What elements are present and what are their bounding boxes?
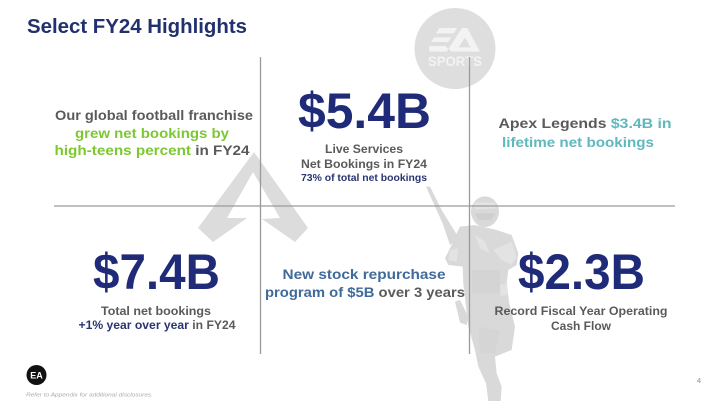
stat: total net bookings: Total net bookings [101, 306, 211, 318]
stat: live services net bookings: $5.4B [298, 83, 431, 139]
text block: global football franchise: high-teens percent in FY24 [54, 142, 250, 158]
text block: Apex Legends: Apex Legends $3.4B in [498, 115, 672, 131]
icon: Apex Legends watermark [198, 152, 308, 242]
divider lines [54, 57, 675, 354]
text block: stock repurchase: program of $5B over 3 years [265, 284, 465, 300]
text block: Apex Legends [498, 115, 672, 150]
stat: operating cash flow: Record Fiscal Year Operating [494, 306, 668, 318]
stat: total net bookings: +1% year over year in FY24 [78, 320, 236, 332]
stat: live services net bookings: Net Bookings in FY24 [301, 159, 428, 171]
icon: EA logo [26, 365, 46, 385]
stat: operating cash flow: $2.3B [518, 244, 645, 300]
text block: global football franchise [54, 107, 253, 158]
stat: operating cash flow [494, 244, 668, 333]
text block: stock repurchase [265, 266, 465, 300]
text block: Apex Legends: lifetime net bookings [502, 134, 654, 150]
text block: global football franchise: grew net bookings by [75, 125, 229, 141]
stat: operating cash flow: Cash Flow [551, 321, 611, 333]
stat: total net bookings: $7.4B [93, 244, 220, 300]
title: Select FY24 Highlights [27, 15, 247, 38]
stat: live services net bookings [298, 83, 431, 184]
icon: EA Sports logo [414, 8, 496, 89]
text block: stock repurchase: New stock repurchase [282, 266, 446, 282]
page number: 4 [697, 378, 701, 385]
stat: total net bookings [78, 244, 236, 332]
icon: EA Sports logo: SPORTS [428, 53, 482, 69]
text block: global football franchise: Our global football franchise [55, 107, 253, 123]
icon: soldier watermark [426, 187, 518, 401]
stat: live services net bookings: 73% of total net bookings [301, 173, 427, 184]
stat: live services net bookings: Live Services [325, 144, 403, 156]
footnote: Refer to Appendix for additional disclosures. [26, 392, 153, 398]
icon: EA logo: EA [30, 370, 43, 380]
